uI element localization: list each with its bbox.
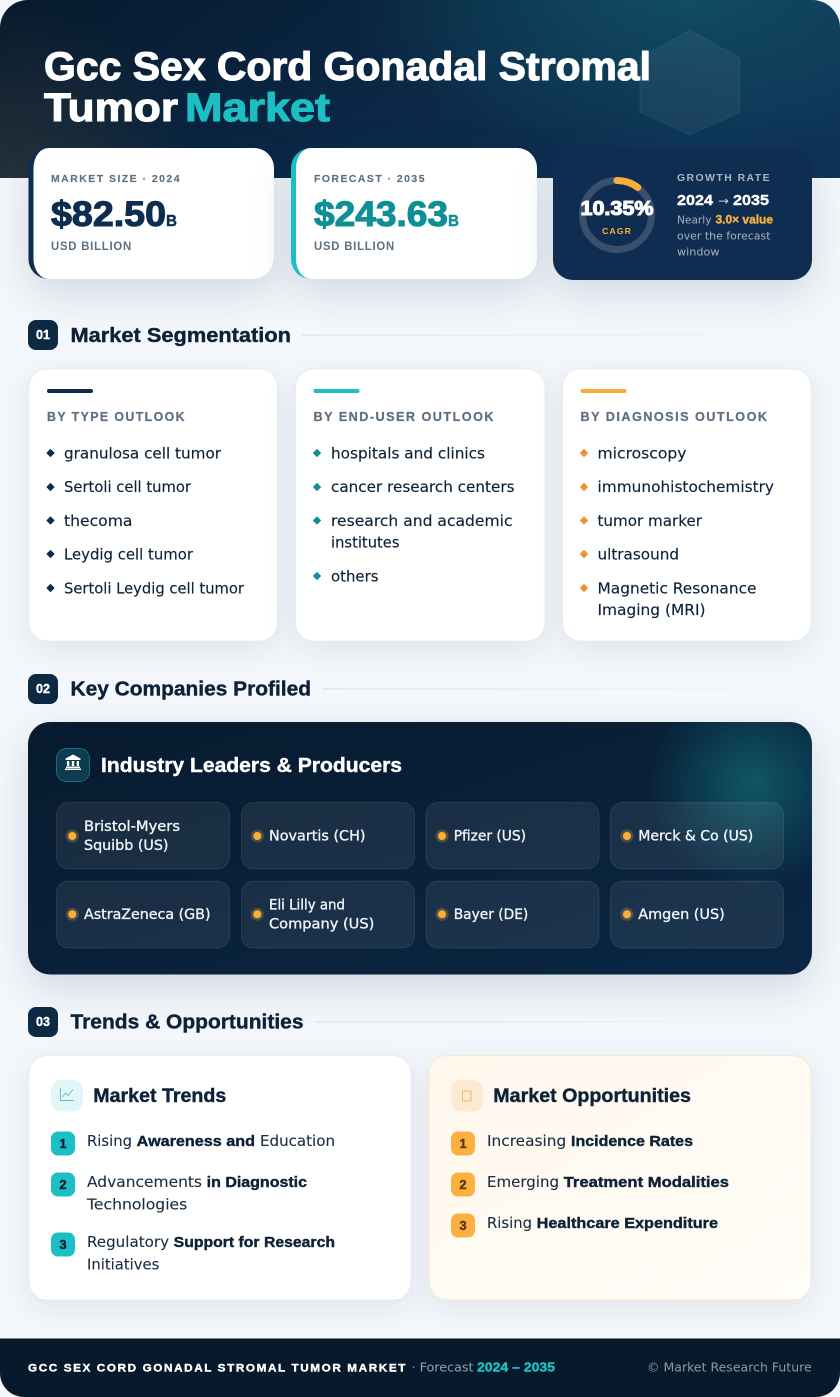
panel: by type outlook: BY TYPE OUTLOOK — [47, 409, 186, 424]
trend 2: in Diagnostic — [207, 1174, 307, 1191]
trend 2 — [51, 1172, 307, 1214]
icon: chart — [51, 1080, 83, 1112]
footer: 2024 – 2035 — [477, 1360, 555, 1374]
opportunity 3: Rising — [487, 1214, 532, 1232]
growth rate text: → — [718, 194, 729, 208]
company: Amgen — [610, 881, 784, 948]
icon: hexagon — [640, 30, 740, 135]
panel: by type outlook — [29, 369, 278, 641]
company: AstraZeneca: AstraZeneca (GB) — [84, 907, 210, 923]
panel: by end-user outlook: research and academic — [331, 512, 512, 530]
panel: by type outlook: thecoma — [64, 512, 132, 530]
section heading: market segmentation: 01 — [36, 327, 50, 342]
trend 1: 1 — [59, 1136, 67, 1151]
opportunity 3: 3 — [459, 1218, 467, 1233]
company: Novartis: Novartis (CH) — [269, 828, 366, 844]
trend 2: Technologies — [86, 1196, 187, 1214]
title: Market — [185, 86, 330, 130]
trend 1: Rising — [87, 1132, 132, 1150]
opportunity 2: Treatment Modalities — [564, 1174, 729, 1191]
company: Amgen: Amgen (US) — [638, 907, 725, 923]
growth rate text — [677, 172, 773, 258]
header banner — [0, 0, 840, 178]
stat card: growth rate — [553, 148, 812, 280]
panel: by end-user outlook: cancer research centers — [331, 478, 515, 496]
trend 3: Regulatory — [87, 1233, 169, 1251]
section heading: trends and opportunities — [28, 1007, 812, 1037]
company: Pfizer — [426, 802, 599, 869]
company: Eli Lilly — [242, 881, 414, 948]
panel heading: Industry Leaders & Producers — [101, 755, 402, 777]
panel: by type outlook: granulosa cell tumor — [64, 444, 222, 462]
opportunity 3 — [451, 1214, 718, 1238]
section heading: key companies — [28, 674, 812, 704]
opportunity 2 — [451, 1172, 729, 1196]
trend 3 — [51, 1232, 335, 1274]
panel: by end-user outlook: BY END-USER OUTLOOK — [314, 409, 495, 424]
opportunity 1 — [451, 1132, 693, 1156]
section heading: key companies: Key Companies Profiled — [70, 678, 311, 700]
title: Gcc Sex Cord Gonadal Stromal — [44, 45, 651, 89]
section heading: market segmentation — [28, 320, 812, 350]
panel: by type outlook: Leydig cell tumor — [64, 546, 194, 564]
opportunity 3: Healthcare Expenditure — [537, 1215, 718, 1232]
opportunity 1: Increasing — [487, 1132, 566, 1150]
company: Eli Lilly: Eli Lilly and — [269, 898, 345, 914]
section heading: trends and opportunities: 03 — [36, 1014, 50, 1029]
stat card: forecast: $243.63 — [314, 195, 448, 234]
stat card: market size: USD BILLION — [51, 241, 132, 253]
company: Bayer — [426, 881, 599, 948]
trend 2: 2 — [59, 1177, 67, 1192]
trend 2: Advancements — [87, 1173, 202, 1191]
CAGR ring chart — [580, 180, 654, 250]
growth rate text: GROWTH RATE — [677, 172, 771, 184]
company: Bristol-Myers Squibb: Squibb (US) — [84, 838, 168, 854]
growth rate text: 3.0× value — [716, 214, 773, 226]
CAGR ring chart: CAGR — [602, 226, 632, 236]
panel: by diagnosis outlook: BY DIAGNOSIS OUTLOOK — [580, 409, 768, 424]
panel: market opportunities — [429, 1056, 811, 1300]
company: Bayer: Bayer (DE) — [454, 907, 528, 923]
panel: by diagnosis outlook: tumor marker — [598, 512, 703, 530]
stat card: forecast: USD BILLION — [314, 241, 395, 253]
panel: by end-user outlook — [296, 369, 545, 641]
panel: market trends — [29, 1056, 411, 1300]
footer: GCC SEX CORD GONADAL STROMAL TUMOR MARKET — [28, 1362, 407, 1374]
trend 3: Initiatives — [87, 1256, 159, 1274]
company: Bristol-Myers Squibb: Bristol-Myers — [84, 819, 180, 835]
growth rate text: window — [677, 246, 720, 258]
panel: industry leaders — [28, 722, 812, 974]
company: Pfizer: Pfizer (US) — [454, 828, 526, 844]
trend 3: Support for Research — [174, 1234, 335, 1251]
trend 1 — [51, 1132, 335, 1156]
title — [44, 45, 651, 130]
trend 1: Awareness and — [137, 1133, 255, 1150]
section heading: trends and opportunities: Trends & Opportunities — [70, 1012, 304, 1034]
stat card: market size — [28, 148, 274, 279]
opportunity 1: 1 — [459, 1136, 467, 1151]
title: Tumor — [44, 86, 178, 130]
company: Bristol-Myers Squibb — [56, 802, 230, 869]
company: AstraZeneca — [56, 881, 230, 948]
stat card: forecast: B — [448, 213, 459, 230]
growth rate text: 2035 — [733, 192, 769, 209]
panel: by diagnosis outlook: microscopy — [598, 444, 687, 462]
panel: by type outlook: Sertoli Leydig cell tumor — [64, 580, 245, 598]
panel: by diagnosis outlook: immunohistochemistry — [598, 478, 774, 496]
company: Merck: Merck & Co (US) — [638, 828, 753, 844]
stat card: market size: $82.50 — [51, 195, 166, 234]
opportunity 2: Emerging — [487, 1173, 559, 1191]
stat card: forecast — [291, 148, 537, 279]
opportunity 1: Incidence Rates — [571, 1133, 693, 1150]
section heading: market segmentation: Market Segmentation — [70, 325, 291, 347]
panel: by diagnosis outlook: Magnetic Resonance — [598, 580, 756, 598]
stat card: market size: B — [166, 213, 177, 230]
stat card: market size: MARKET SIZE · 2024 — [51, 173, 181, 185]
panel: by end-user outlook: institutes — [331, 534, 400, 552]
company: Eli Lilly: Company (US) — [269, 916, 374, 932]
icon: bank — [56, 748, 90, 782]
growth rate text: over the forecast — [677, 230, 771, 242]
footer: · Forecast — [412, 1360, 474, 1374]
panel: by end-user outlook: others — [331, 568, 379, 586]
panel: by end-user outlook: hospitals and clinics — [331, 444, 485, 462]
company: Novartis — [242, 802, 414, 869]
footer — [0, 1338, 840, 1397]
company: Merck — [610, 802, 784, 869]
heading: Market Trends — [93, 1086, 226, 1107]
panel: by diagnosis outlook — [562, 369, 811, 641]
panel: by diagnosis outlook: ultrasound — [598, 546, 679, 564]
heading: Market Opportunities — [493, 1086, 691, 1107]
CAGR ring chart: 10.35% — [580, 198, 654, 220]
panel: by diagnosis outlook: Imaging (MRI) — [598, 601, 706, 619]
growth rate text: Nearly — [677, 214, 712, 226]
icon: placeholder — [451, 1080, 483, 1112]
growth rate text: 2024 — [677, 192, 714, 209]
stat card: forecast: FORECAST · 2035 — [314, 173, 426, 185]
section heading: key companies: 02 — [36, 681, 50, 696]
trend 3: 3 — [59, 1237, 67, 1252]
footer: © Market Research Future — [647, 1360, 812, 1374]
panel: by type outlook: Sertoli cell tumor — [64, 478, 192, 496]
opportunity 2: 2 — [459, 1177, 467, 1192]
trend 1: Education — [260, 1132, 335, 1150]
